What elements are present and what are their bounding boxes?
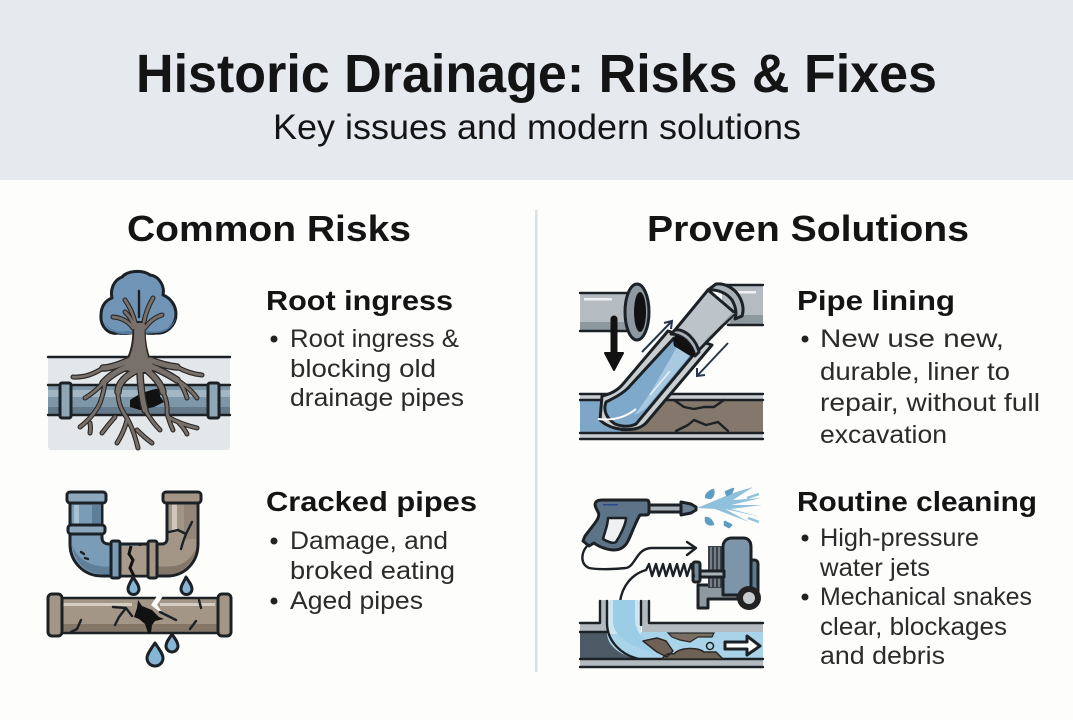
solution: routine cleaning text: clear, blockages — [820, 613, 1007, 641]
risk: cracked pipes text: Damage, and — [290, 527, 448, 555]
icon: cracked pipes — [48, 492, 231, 666]
lower host pipe — [580, 394, 763, 439]
solution: routine cleaning text: High-pressure — [820, 524, 979, 552]
arrows — [605, 319, 728, 376]
icon: routine cleaning — [580, 487, 763, 667]
icon: pipe lining — [580, 284, 763, 439]
solution: pipe lining text: New use new, — [820, 325, 1004, 353]
risk: root ingress text — [266, 285, 464, 412]
solution: routine cleaning text: Routine cleaning — [797, 486, 1037, 517]
icon: drain snake machine — [619, 538, 761, 639]
solution: routine cleaning text: Mechanical snakes — [820, 583, 1032, 611]
icon: cracked straight pipe — [48, 594, 231, 636]
solution: pipe lining text — [797, 285, 1040, 449]
icon: blocked drain — [580, 600, 763, 667]
risk: root ingress text: drainage pipes — [290, 384, 464, 412]
risk: cracked pipes text: Cracked pipes — [266, 486, 477, 517]
risk: cracked pipes text: broked eating — [290, 557, 455, 585]
liner tube — [598, 284, 743, 430]
risk: root ingress text: Root ingress — [266, 285, 453, 316]
solution: pipe lining text: excavation — [820, 421, 947, 449]
heading: proven solutions: Proven Solutions — [647, 208, 969, 249]
solution: routine cleaning text: water jets — [819, 554, 930, 582]
icon: pressure washer gun — [582, 500, 696, 569]
solution: routine cleaning text — [797, 486, 1037, 670]
solution: pipe lining text: repair, without full — [820, 389, 1040, 417]
header band — [0, 0, 1073, 180]
panel: proven solutions — [580, 208, 1040, 670]
solution: routine cleaning text: and debris — [820, 642, 945, 670]
heading: common risks: Common Risks — [127, 208, 411, 249]
icon: cracked u-bend — [67, 492, 201, 578]
solution: pipe lining text: durable, liner to — [820, 358, 1010, 386]
risk: cracked pipes text: Aged pipes — [290, 587, 423, 615]
solution: pipe lining text: Pipe lining — [797, 285, 955, 316]
risk: cracked pipes text — [266, 486, 477, 615]
left pipe and flange — [580, 284, 649, 340]
subtitle: Key issues and modern solutions — [273, 108, 801, 147]
panel: common risks — [48, 208, 477, 666]
icon: tree roots invading pipe — [48, 271, 230, 450]
icon: water drops — [128, 577, 192, 666]
risk: root ingress text: blocking old — [290, 355, 436, 383]
title: Historic Drainage: Risks & Fixes — [136, 44, 937, 104]
icon: water spray — [697, 487, 762, 527]
risk: root ingress text: Root ingress & — [290, 325, 459, 353]
right pipe — [715, 285, 763, 325]
